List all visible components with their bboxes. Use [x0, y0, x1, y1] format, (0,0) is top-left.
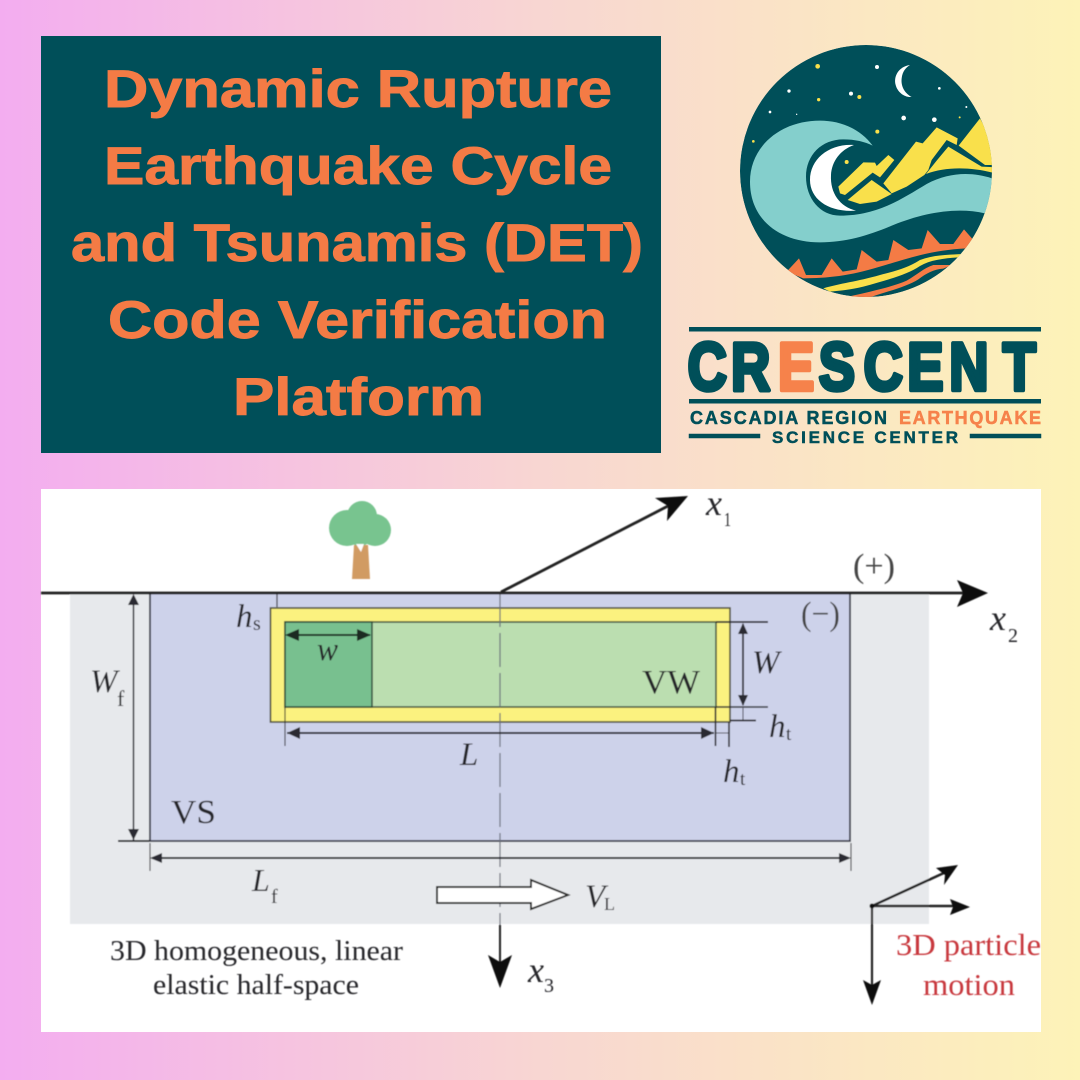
CRESCENT word: C	[864, 329, 903, 405]
CRESCENT word: E	[778, 329, 814, 405]
half-space caption	[110, 936, 404, 1001]
diagram labels: L	[251, 862, 270, 898]
particle motion arrows	[863, 865, 970, 1005]
title text	[71, 60, 643, 427]
diagram labels: 2	[1008, 625, 1018, 647]
diagram labels: VW	[642, 664, 701, 701]
VS fault region	[150, 593, 850, 841]
diagram labels: h	[723, 754, 740, 790]
particle motion caption: 3D particle	[896, 927, 1041, 962]
VW zone	[285, 622, 716, 707]
diagram labels: VS	[171, 794, 216, 831]
icon: stars	[752, 64, 967, 164]
diagram labels: L	[459, 737, 478, 773]
title text: Platform	[233, 368, 484, 427]
diagram labels: x	[527, 950, 544, 990]
diagram labels: 1	[724, 509, 731, 531]
yellow transition zone	[270, 608, 730, 722]
dimension: W and ht	[277, 594, 768, 720]
diagram labels: x	[705, 483, 722, 523]
x3 dashed centre line	[499, 593, 501, 925]
icon: circular CRESCENT logo emblem	[740, 45, 995, 297]
title text: Code Verification	[108, 291, 607, 350]
half-space caption: 3D homogeneous, linear	[110, 936, 404, 967]
title text: Earthquake Cycle	[104, 137, 612, 196]
wordmark subtitle: EARTHQUAKE	[899, 408, 1041, 428]
x3 axis arrow	[488, 925, 512, 988]
x1 axis arrow	[501, 496, 688, 592]
diagram labels: W	[90, 664, 120, 700]
nucleation zone	[285, 622, 372, 707]
CRESCENT wordmark	[688, 327, 1041, 447]
dimension: Wf	[118, 594, 150, 841]
CRESCENT word: T	[1003, 329, 1036, 405]
CRESCENT word: E	[907, 329, 943, 405]
wordmark subtitle: CASCADIA REGION	[690, 408, 887, 428]
icon: yellow mountains	[838, 118, 995, 204]
icon: small crescent moon	[895, 65, 912, 97]
wordmark subtitle	[689, 408, 1041, 447]
dimension: L	[285, 707, 729, 747]
CRESCENT word: N	[949, 329, 988, 405]
wordmark subtitle: SCIENCE CENTER	[772, 428, 958, 447]
icon: orange peaks and strata	[787, 229, 973, 297]
diagram labels: x	[989, 598, 1006, 638]
icon: tree	[329, 501, 391, 579]
diagram labels: L	[604, 894, 615, 914]
diagram labels: h	[236, 599, 252, 635]
title text: and Tsunamis (DET)	[71, 214, 643, 273]
diagram labels: w	[317, 632, 338, 668]
half-space grey block	[70, 593, 929, 924]
CRESCENT word: R	[731, 329, 770, 405]
diagram labels: f	[271, 886, 278, 908]
CRESCENT word: C	[688, 329, 727, 405]
diagram labels: 3	[544, 975, 554, 997]
velocity arrow VL	[437, 880, 568, 909]
particle motion caption	[896, 927, 1041, 1002]
title panel	[41, 36, 661, 453]
diagram labels: (−)	[801, 596, 840, 633]
dimension: w	[285, 629, 371, 641]
diagram labels: h	[769, 709, 786, 745]
particle motion caption: motion	[923, 967, 1016, 1002]
x2 axis arrow	[41, 580, 988, 607]
diagram labels: t	[786, 724, 792, 745]
half-space caption: elastic half-space	[153, 970, 359, 1001]
diagram labels: W	[752, 645, 782, 681]
diagram labels: s	[253, 613, 261, 635]
dimension: Lf	[150, 843, 851, 871]
icon: large crescent moon	[810, 145, 856, 211]
panel: fault model diagram	[41, 483, 1041, 1032]
diagram labels	[90, 483, 1018, 997]
title text: Dynamic Rupture	[104, 60, 612, 119]
diagram labels: t	[740, 769, 746, 790]
icon: teal wave	[750, 121, 995, 242]
diagram labels: (+)	[853, 548, 895, 585]
diagram labels: f	[117, 686, 125, 711]
diagram labels: V	[585, 879, 609, 915]
CRESCENT word: S	[819, 329, 855, 405]
